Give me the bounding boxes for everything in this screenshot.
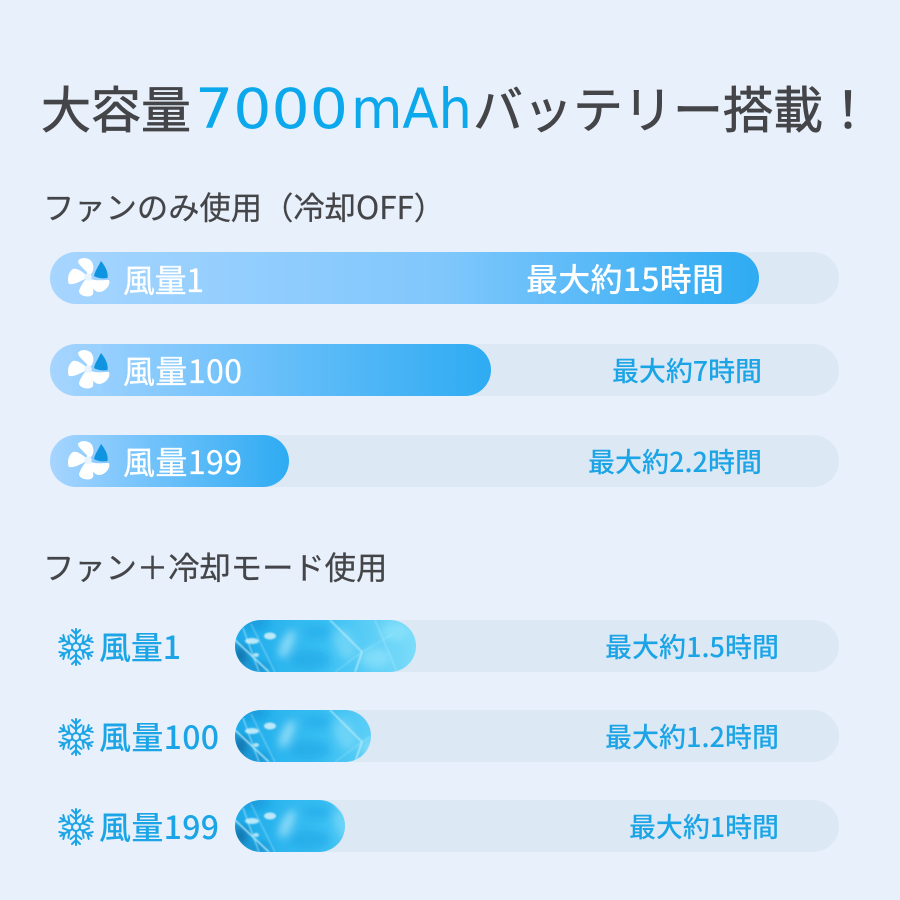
bar: ice texture xyxy=(235,710,371,762)
bar xyxy=(50,344,491,396)
icon: fan xyxy=(68,441,109,479)
icon: fan xyxy=(68,350,109,388)
bar: ice texture xyxy=(231,618,416,673)
icon: snowflake xyxy=(58,719,94,755)
title: 大容量 xyxy=(41,71,191,143)
title: バッテリー搭載！ xyxy=(473,71,873,143)
value: 最大約7時間 xyxy=(612,350,762,389)
value: 最大約15時間 xyxy=(526,255,724,301)
row: fan level 1 xyxy=(50,252,839,304)
bar xyxy=(50,435,289,487)
heading: fan only: ファンのみ使用（冷却OFF） xyxy=(43,184,445,229)
value: 最大約1時間 xyxy=(629,806,779,845)
row: cooling level 100 xyxy=(58,708,839,763)
value: 最大約2.2時間 xyxy=(588,441,762,480)
icon: snowflake xyxy=(58,629,94,665)
track xyxy=(235,620,839,672)
label: 風量1 xyxy=(123,256,204,302)
icon: fan xyxy=(68,258,109,296)
row: cooling level 199 xyxy=(58,798,839,853)
label: 風量199 xyxy=(99,803,219,849)
track xyxy=(235,800,839,852)
bar: ice texture xyxy=(235,800,345,852)
label: 風量199 xyxy=(123,438,242,484)
heading: fan and cooling: ファン＋冷却モード使用 xyxy=(43,544,387,589)
icon: snowflake xyxy=(58,809,94,845)
value: 最大約1.5時間 xyxy=(605,626,779,665)
track xyxy=(235,710,839,762)
title: 7000 xyxy=(195,77,348,141)
track xyxy=(50,344,839,396)
track xyxy=(50,252,839,304)
label: 風量100 xyxy=(99,713,219,759)
title: mAh xyxy=(351,77,472,141)
panel: fan only bars xyxy=(50,252,839,487)
row: fan level 100 xyxy=(50,344,839,396)
label: 風量1 xyxy=(99,623,181,669)
title xyxy=(41,71,873,143)
track xyxy=(50,435,839,487)
row: cooling level 1 xyxy=(58,618,839,673)
panel: fan and cooling bars xyxy=(58,618,839,853)
label: 風量100 xyxy=(123,347,242,393)
bar xyxy=(50,252,759,304)
row: fan level 199 xyxy=(50,435,839,487)
value: 最大約1.2時間 xyxy=(605,716,779,755)
